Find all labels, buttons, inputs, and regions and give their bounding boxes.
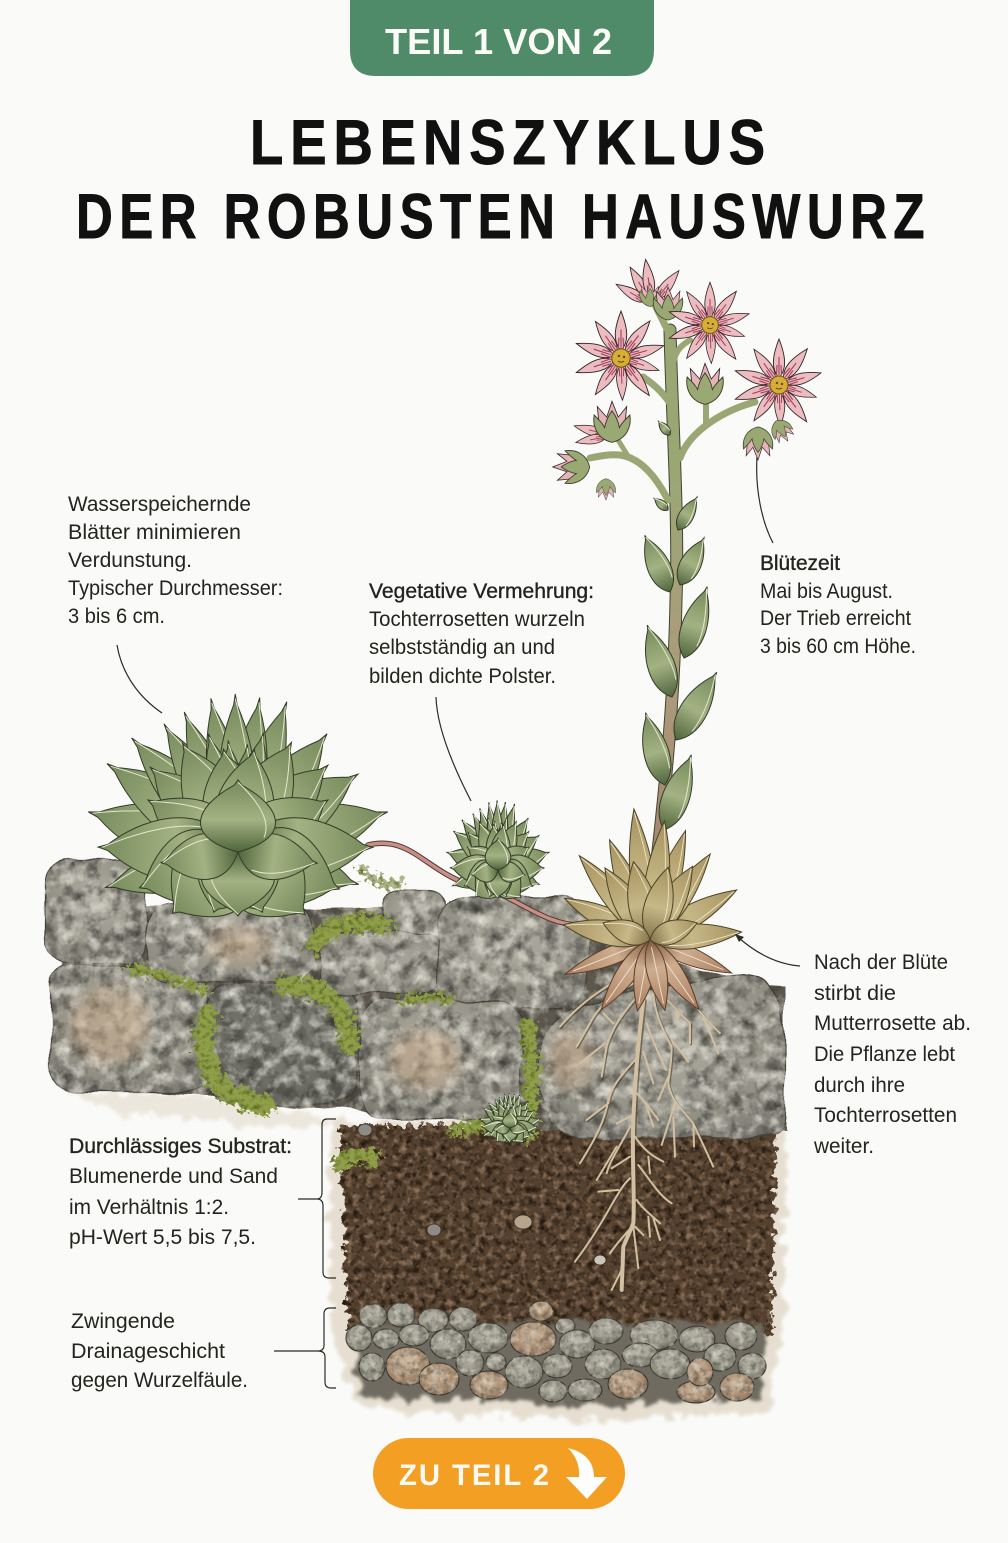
side roots: [560, 977, 720, 1290]
annotation: water-storing leaves: 3 bis 6 cm.: [68, 605, 165, 628]
stone: second: [147, 905, 315, 983]
annotation: substrate: Blumenerde und Sand: [69, 1165, 278, 1188]
annotation: vegetative propagation: [369, 580, 594, 688]
annotation: water-storing leaves: Typischer Durchmesser:: [68, 577, 283, 600]
annotation: mother rosette dies: [813, 951, 971, 1158]
half-open left bud: [573, 401, 630, 447]
bracket: substrate: [298, 1119, 336, 1278]
substrate layer: [340, 1125, 776, 1335]
annotation: flowering time: Der Trieb erreicht: [760, 607, 911, 630]
flower centre: [668, 282, 750, 364]
annotation: water-storing leaves: Blätter minimieren: [68, 521, 241, 544]
illustration: flowers and buds: [553, 259, 822, 500]
illustration: stone wall: [45, 860, 785, 1138]
annotation: flowering time: 3 bis 60 cm Höhe.: [760, 635, 916, 658]
stone: lower left: [50, 965, 207, 1092]
illustration: tiny rosette in wall: [479, 1093, 541, 1148]
bud near top flower: [653, 287, 683, 320]
stone: lower right: [538, 975, 785, 1138]
badge: part 1 of 2: TEIL 1 VON 2: [385, 21, 612, 62]
stone: lower dark: [207, 985, 357, 1103]
annotation: mother rosette dies: Die Pflanze lebt: [814, 1043, 955, 1066]
annotation: substrate: Durchlässiges Substrat:: [69, 1135, 292, 1158]
annotation: water-storing leaves: [68, 493, 283, 628]
annotation: drainage: Drainageschicht: [71, 1340, 225, 1363]
illustration: daughter rosette connecting stolons: [368, 843, 580, 925]
annotation: mother rosette dies: weiter.: [813, 1135, 874, 1158]
annotation: mother rosette dies: durch ihre: [814, 1074, 905, 1097]
pebbles in soil: [358, 1124, 606, 1265]
annotation: drainage: Zwingende: [71, 1310, 175, 1333]
annotation: substrate: [69, 1135, 292, 1249]
button: to part 2: ZU TEIL 2: [399, 1459, 551, 1492]
root shadow: [561, 978, 721, 1291]
leader line: leaves: [117, 645, 162, 713]
annotation: substrate: pH-Wert 5,5 bis 7,5.: [69, 1226, 256, 1249]
annotation: vegetative propagation: Vegetative Vermehrung:: [369, 580, 594, 603]
small bud: [596, 479, 616, 500]
illustration: large mother rosette: [81, 694, 395, 944]
bracket: drainage: [274, 1308, 336, 1388]
leader line: daughter rosette: [436, 697, 471, 801]
title: LEBENSZYKLUS: [250, 108, 772, 178]
stone: top left: [45, 860, 147, 963]
illustration: stem leaves: [634, 419, 728, 835]
illustration: flower stem: [590, 305, 755, 860]
annotation: mother rosette dies: stirbt die: [814, 982, 896, 1005]
annotation: mother rosette dies: Nach der Blüte: [814, 951, 948, 974]
annotation: mother rosette dies: Mutterrosette ab.: [814, 1012, 971, 1035]
annotation: vegetative propagation: bilden dichte Polster.: [369, 665, 556, 688]
title: [76, 108, 931, 252]
stone: fourth: [437, 897, 589, 1008]
illustration: warm patches on stones: [70, 927, 592, 1090]
flower left: [575, 311, 665, 400]
drainage gravel layer: [346, 1301, 766, 1403]
annotation: flowering time: [760, 552, 916, 658]
annotation: water-storing leaves: Verdunstung.: [68, 549, 192, 572]
annotation: vegetative propagation: Tochterrosetten wurzeln: [369, 608, 585, 631]
main root: [622, 1000, 643, 1290]
buds under right flower: [743, 427, 773, 460]
icon: curved arrow down: [566, 1448, 607, 1499]
stone: lower centre: [360, 1000, 520, 1120]
illustration: moss in wall joints: [130, 870, 532, 1165]
leader line: flowers: [757, 457, 773, 543]
arrow: to mother rosette: [735, 934, 800, 966]
annotation: water-storing leaves: Wasserspeichernde: [68, 493, 251, 516]
annotation: flowering time: Mai bis August.: [760, 580, 893, 603]
badge: part 1 of 2: [350, 0, 654, 76]
illustration: pale wash below wall: [60, 1088, 335, 1128]
annotation: flowering time: Blütezeit: [760, 552, 840, 575]
dark joints behind stones: [60, 905, 785, 1130]
buds centre: [687, 363, 723, 404]
illustration: daughter rosette: [445, 800, 551, 910]
bud far left: [553, 450, 590, 484]
stone: third: [320, 932, 442, 993]
illustration: roots of the mother rosette: [560, 977, 721, 1291]
flower right: [734, 339, 822, 427]
button: to part 2: [373, 1438, 625, 1509]
annotation: substrate: im Verhältnis 1:2.: [69, 1196, 229, 1219]
stone: small back: [385, 890, 447, 948]
top half-open flower: [614, 259, 683, 307]
annotation: mother rosette dies: Tochterrosetten: [814, 1104, 957, 1127]
pale wash around soil and gravel: [330, 1120, 785, 1420]
gravel bed: [350, 1322, 764, 1404]
annotation: drainage: [71, 1310, 248, 1392]
illustration: soil cross-section: [330, 1120, 785, 1420]
illustration: mother rosette (withering) with dead leaves: [560, 807, 743, 1015]
annotation: vegetative propagation: selbstständig an und: [369, 636, 555, 659]
annotation: drainage: gegen Wurzelfäule.: [71, 1369, 248, 1392]
